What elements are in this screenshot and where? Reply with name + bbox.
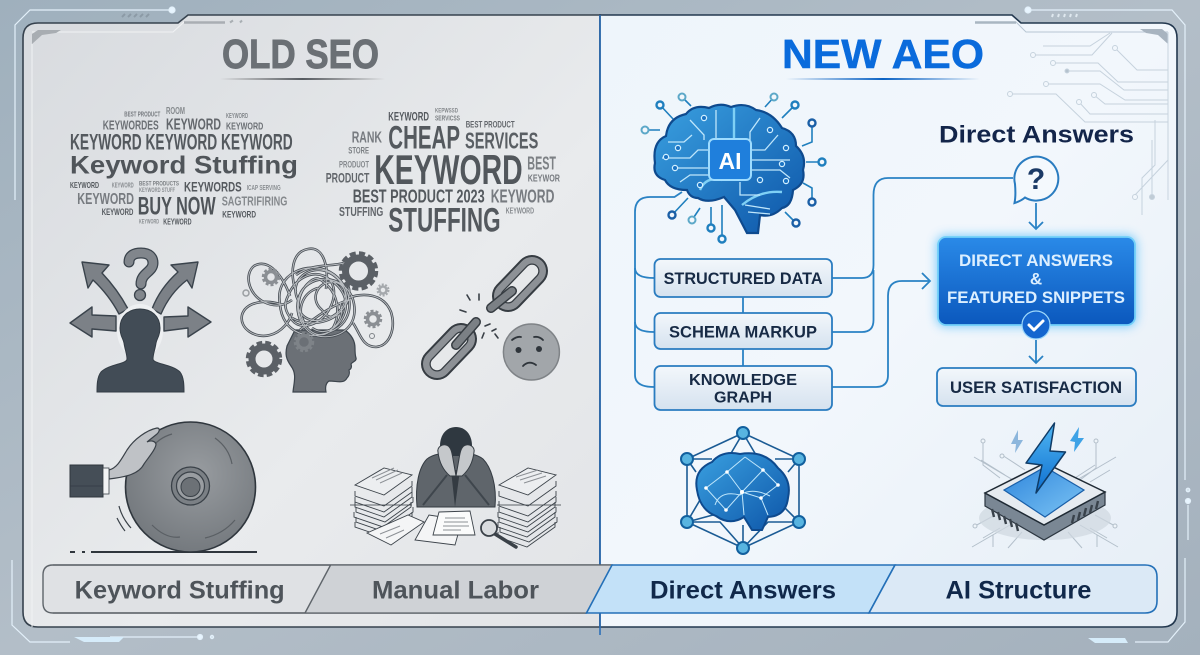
icon: broken chain and sad face xyxy=(437,271,559,380)
icon: network brain xyxy=(681,427,805,554)
word cloud: right: STORE xyxy=(348,146,369,157)
word cloud: left: ROOM xyxy=(166,106,185,117)
word cloud: right: PRODUCT xyxy=(326,169,370,185)
panel: new AEO background xyxy=(600,15,1177,627)
icon: AI chip with lightning bolt xyxy=(972,423,1118,548)
word cloud: right: KEYWOR xyxy=(528,174,561,185)
title: NEW AEO: NEW AEO xyxy=(782,31,984,77)
icon: question speech bubble: ? xyxy=(1027,163,1045,196)
icon: tangled mind with gears xyxy=(242,249,393,392)
word cloud: left: SAGTRIFIRING xyxy=(222,195,287,209)
icon: overwhelmed man with papers xyxy=(350,427,561,547)
word cloud: left: KEYWORDS xyxy=(184,179,242,195)
word cloud: right: PRODUOT xyxy=(339,159,369,169)
word cloud: right: BEST PRODUCT 2023 xyxy=(353,186,485,206)
bottom bar: new: AI Structure xyxy=(946,576,1092,604)
word cloud: left: BUY NOW xyxy=(138,193,216,221)
connector lines xyxy=(635,178,1043,387)
box: user satisfaction xyxy=(937,368,1136,406)
word cloud: right: BEST PRODUCT xyxy=(466,119,515,129)
word cloud: right: STUFFING xyxy=(388,202,501,240)
word cloud: right: SERVICES xyxy=(465,127,538,153)
word cloud: right xyxy=(326,108,561,240)
box: structured data: STRUCTURED DATA xyxy=(664,269,823,288)
word cloud: right: SERVICSS xyxy=(435,115,460,122)
word cloud: left: BEST PRODUCTS xyxy=(139,181,179,188)
word cloud: left: KEYWORD xyxy=(77,191,134,208)
bottom bar: old: Manual Labor xyxy=(372,576,539,604)
word cloud: left: Keyword Stuffing xyxy=(70,151,298,179)
word cloud: left: KEYWORD xyxy=(166,116,221,133)
word cloud: right: BEST xyxy=(527,153,556,173)
word cloud: left: KEYWORD xyxy=(70,180,99,190)
box: direct answers and featured snippets: DIRECT ANSWERS xyxy=(959,251,1113,270)
word cloud: right: STUFFING xyxy=(339,204,383,219)
box: schema markup: SCHEMA MARKUP xyxy=(669,323,817,342)
word cloud: left: KEYWORD xyxy=(102,207,133,218)
word cloud: left: BEST PRODUCT xyxy=(124,110,161,119)
box: direct answers and featured snippets: FEATURED SNIPPETS xyxy=(947,288,1125,307)
word cloud: left: KEYWORD xyxy=(226,113,248,120)
icon: AI brain with circuit: AI xyxy=(718,148,742,174)
bottom bar: new: Direct Answers xyxy=(650,576,836,604)
panel: old SEO background xyxy=(23,15,600,627)
icon: question speech bubble xyxy=(1014,157,1058,203)
center divider xyxy=(599,15,601,635)
bottom bar: old: Keyword Stuffing xyxy=(75,576,285,604)
word cloud: right: RANK xyxy=(352,129,382,146)
title: OLD SEO: OLD SEO xyxy=(222,31,379,77)
word cloud: left: KEYWORDES xyxy=(103,117,159,132)
box: knowledge graph: KNOWLEDGE xyxy=(689,372,797,389)
word cloud: left: KEYWORD xyxy=(226,120,264,132)
word cloud: left: KEYWORD xyxy=(139,219,159,225)
word cloud: right: KEPWSSD xyxy=(435,108,458,115)
word cloud: right: KEYWORD xyxy=(506,206,534,215)
box: structured data xyxy=(654,259,832,297)
box: direct answers and featured snippets: & xyxy=(1030,270,1042,288)
word cloud: right: KEYWORD xyxy=(388,112,429,124)
word cloud: left: KEYWORD KEYWORD KEYWORD xyxy=(70,129,293,154)
box: direct answers and featured snippets xyxy=(936,235,1137,339)
word cloud: left: KEYWORD xyxy=(163,218,192,227)
heading: direct answers: Direct Answers xyxy=(939,122,1134,149)
word cloud: left: KEYWORD STUFF xyxy=(139,188,175,194)
circuit pattern top right xyxy=(1008,33,1168,215)
box: schema markup xyxy=(654,313,832,349)
word cloud: right: CHEAP xyxy=(388,119,460,155)
word cloud: left: KEYWORD xyxy=(112,183,134,190)
bottom bar: new xyxy=(586,565,1157,613)
icon: AI brain with circuit xyxy=(642,94,826,242)
box: knowledge graph xyxy=(654,366,832,410)
word cloud: left xyxy=(70,106,298,227)
word cloud: left: ICAP SERVING xyxy=(247,183,281,192)
box: user satisfaction: USER SATISFACTION xyxy=(950,378,1122,397)
word cloud: right: KEYWORD xyxy=(374,146,523,193)
word cloud: left: KEYWORD xyxy=(222,209,256,219)
word cloud: right: KEYWORD xyxy=(491,187,554,207)
icon: pushing a stone wheel xyxy=(70,422,257,552)
icon: confused person with arrows xyxy=(70,253,211,392)
box: knowledge graph: GRAPH xyxy=(714,390,772,407)
bottom bar: old xyxy=(43,565,612,613)
